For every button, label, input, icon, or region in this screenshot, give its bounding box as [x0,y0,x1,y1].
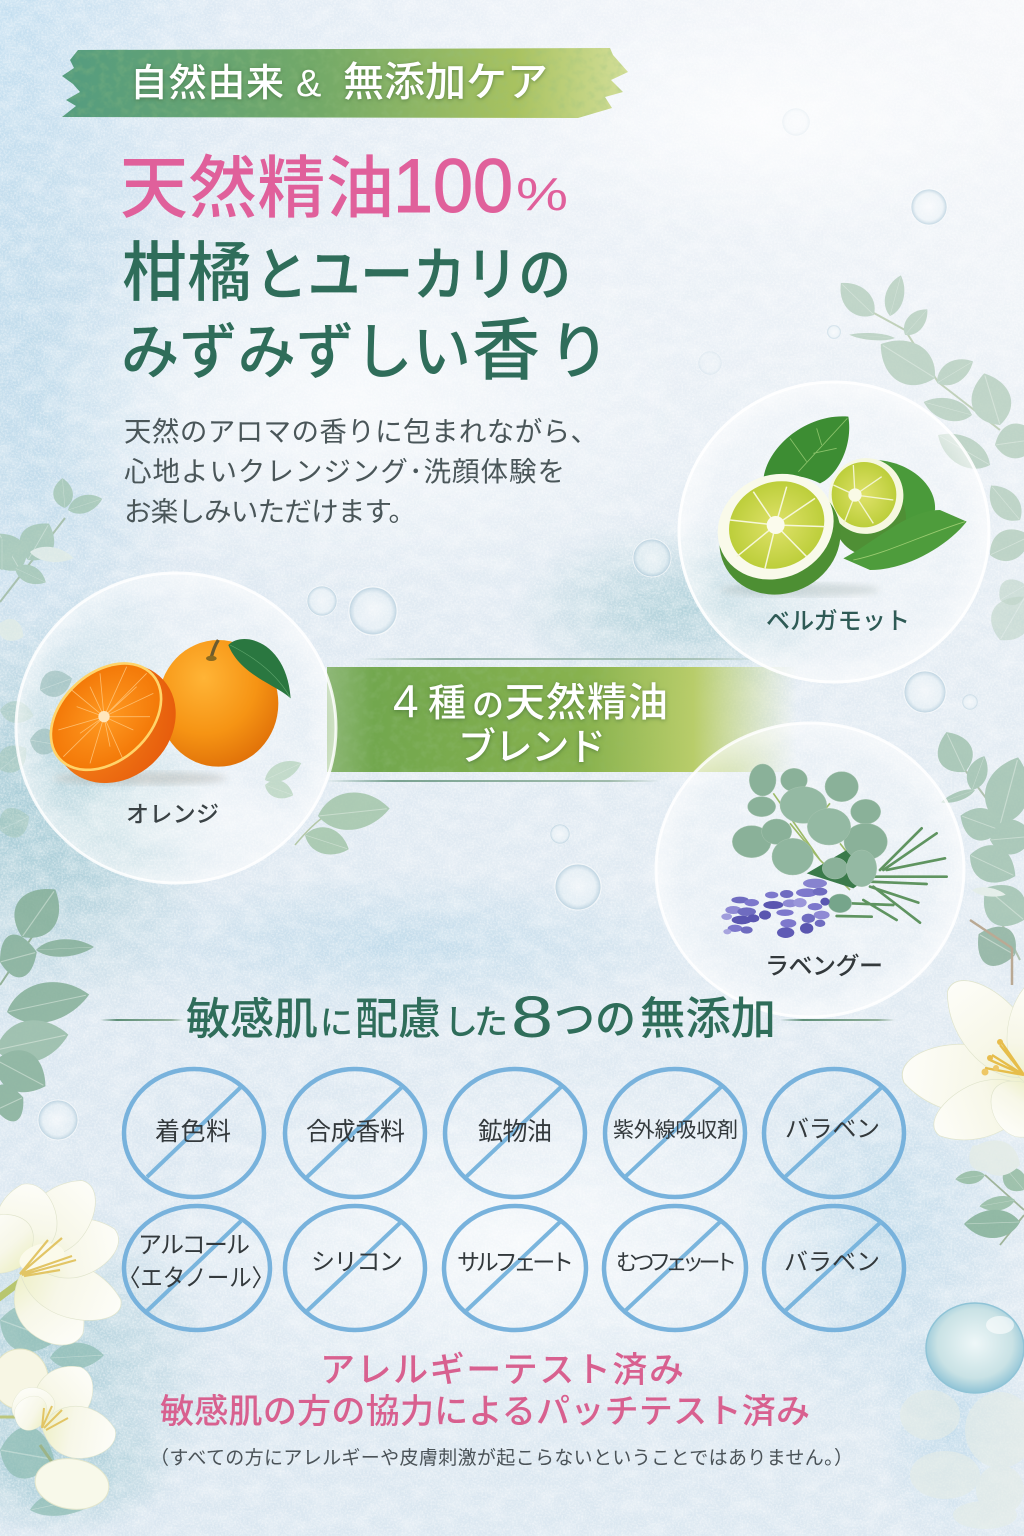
leaves beneath orange bubble [295,789,391,861]
water drops [38,108,978,1140]
banner text: 無添加ケア [343,59,548,105]
lavender and eucalyptus illustration [721,764,947,938]
item: colorant [124,1069,264,1197]
item: colorant: 着色料 [155,1118,231,1146]
section heading: に [320,1004,353,1041]
allergy test statement [160,1351,810,1431]
leaves: teal behind left flowers [0,1296,111,1522]
title: 100 [393,144,513,229]
item: silicone: シリコン [311,1249,403,1276]
bubble: bergamot [679,382,989,682]
leaves: left upper sprig [0,477,105,843]
section heading: した [444,1004,508,1042]
bergamot illustration [700,416,967,614]
title: 天然精油 [120,151,394,227]
large water drop [926,1303,1024,1393]
band text: 4 [393,675,419,727]
item: silicone [285,1206,425,1330]
item: UV absorber: 紫外線吸収剤 [613,1119,738,1142]
description text: 天然のアロマの香りに包まれながら、 [124,416,598,447]
leaves: left lower sprig [0,876,94,1127]
section heading: 無添加 [640,993,776,1044]
leaves: pale bottom right [900,1390,1024,1529]
no-additive icons [118,1069,904,1330]
banner text: 自然由来 [130,63,284,105]
label: orange: オレンジ [126,801,219,827]
band text: 天然精油 [505,681,668,725]
section heading: 敏感肌 [186,995,318,1044]
bubble: orange [16,573,336,883]
section heading [100,985,895,1050]
item: UV absorber [605,1069,745,1197]
section heading: 8 [511,985,553,1050]
item: paraben: バラベン [785,1116,880,1143]
description text: お楽しみいただけます。 [124,496,416,527]
item: garbled label [604,1206,746,1330]
title: り [548,318,610,387]
title: % [516,168,568,220]
title: 柑橘 [122,236,252,309]
item: alcohol [118,1206,274,1330]
label: bergamot: ベルガモット [766,608,910,635]
banner text: & [296,63,321,105]
item: synthetic fragrance [285,1069,425,1197]
top brush banner [62,48,628,118]
section heading: 配慮 [355,995,441,1044]
flower: left upper [0,1166,130,1361]
disclaimer: （すべての方にアレルギーや皮膚刺激が起こらないということではありません。） [150,1447,853,1469]
band text: ブレンド [458,727,606,769]
description text: 心地よいクレンジング･洗顔体験を [124,456,565,487]
orange fruit illustration [28,639,291,808]
bubble: lavender [656,723,964,1017]
allergy test statement: 敏感肌の方の協力によるパッチテスト済み [160,1393,810,1431]
leaves: right mid sprig [954,1133,1024,1245]
item: sulfate: サルフェート [457,1249,574,1275]
item: sulfate [444,1206,586,1330]
item: paraben second [764,1206,904,1330]
leaves: right lower sprig [930,725,1024,985]
green band: 4 oils [325,658,797,782]
item: garbled label: むつフェッート [616,1250,737,1275]
section heading: つの [554,996,636,1043]
allergy test statement: アレルギーテスト済み [320,1351,684,1390]
band text [393,675,668,769]
band text: 種 [428,683,466,725]
title: みずみずしい [121,318,471,386]
item: mineral oil: 鉱物油 [478,1118,552,1146]
banner text [130,59,548,105]
item: paraben [764,1069,904,1197]
label: lavender: ラベングー [765,953,883,980]
description text [124,416,598,527]
item: mineral oil [445,1069,585,1197]
item: paraben second: バラベン [784,1249,880,1276]
title: 香 [472,313,540,389]
item: synthetic fragrance: 合成香料 [306,1118,405,1146]
flower: right [898,963,1024,1153]
title: とユーカリの [255,243,571,308]
item: alcohol: 〈エタノール〉 [118,1265,274,1292]
band text: の [472,687,504,723]
leaves: upper right sprig [831,273,1024,649]
item: alcohol: アルコール [138,1232,250,1259]
title [120,144,610,389]
flower: left lower [0,1349,120,1514]
